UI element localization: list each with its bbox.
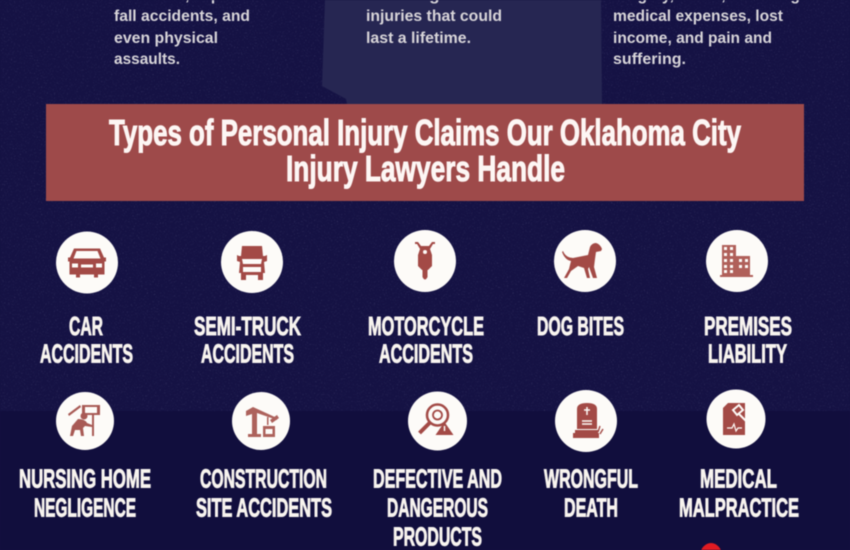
label: premises liability: LIABILITY [708,338,787,368]
text block: right column: medical expenses, lost [613,8,783,25]
label: dog bites: DOG BITES [537,311,624,341]
label: nursing home negligence: NURSING HOME [19,464,151,494]
label: defective and dangerous products: DEFECTIVE AND [373,464,502,494]
text block: middle column: last a lifetime. [366,30,471,47]
silhouette shape behind text [322,0,602,104]
label: nursing home negligence: NEGLIGENCE [34,492,136,522]
banner background [46,104,804,201]
label: motorcycle accidents [368,311,484,368]
text block: right column: suffering. [613,51,686,68]
text block: left column: assaults. [114,51,180,68]
label: car accidents: ACCIDENTS [40,338,133,368]
label: car accidents: CAR [69,311,103,341]
label: semi-truck accidents [194,311,301,368]
icon: construction crane [232,392,290,450]
label: medical malpractice: MEDICAL [700,464,777,494]
text block: right column: income, and pain and [613,30,772,47]
text block: right column [613,0,800,68]
text block: middle column: injuries that could [366,8,502,25]
label: car accidents [40,311,133,368]
label: construction site accidents: SITE ACCIDENTS [196,492,332,522]
icon: defective product magnifier [408,392,467,450]
label: construction site accidents: CONSTRUCTION [200,464,327,494]
label: premises liability [704,311,792,368]
label: semi-truck accidents: ACCIDENTS [201,338,294,368]
icon: semi-truck [221,231,283,293]
text block: left column [114,0,252,68]
heading [109,112,741,189]
label: defective and dangerous products [373,464,502,550]
icon: medical malpractice document [706,390,766,448]
icon: gravestone [555,390,617,452]
icon: dog [554,230,616,292]
label: construction site accidents [196,464,332,522]
label: defective and dangerous products: DANGEROUS [387,492,488,522]
label: semi-truck accidents: SEMI-TRUCK [194,311,301,341]
icon: motorcycle [394,230,456,292]
label: motorcycle accidents: MOTORCYCLE [368,311,484,341]
text block: middle column [366,0,502,47]
label: motorcycle accidents: ACCIDENTS [379,338,473,368]
icon: nursing home [56,392,114,450]
label: wrongful death [544,464,638,522]
label: medical malpractice [679,464,799,522]
label: nursing home negligence [19,464,151,522]
text block: left column: even physical [114,30,218,47]
label: premises liability: PREMISES [704,311,792,341]
red shape cut off at bottom edge [700,543,722,550]
label: wrongful death: DEATH [564,492,618,522]
icon: buildings [706,230,768,292]
heading: Injury Lawyers Handle [286,148,565,189]
text block: left column: fall accidents, and [114,8,250,25]
label: wrongful death: WRONGFUL [544,464,638,494]
icon: car [56,232,118,294]
